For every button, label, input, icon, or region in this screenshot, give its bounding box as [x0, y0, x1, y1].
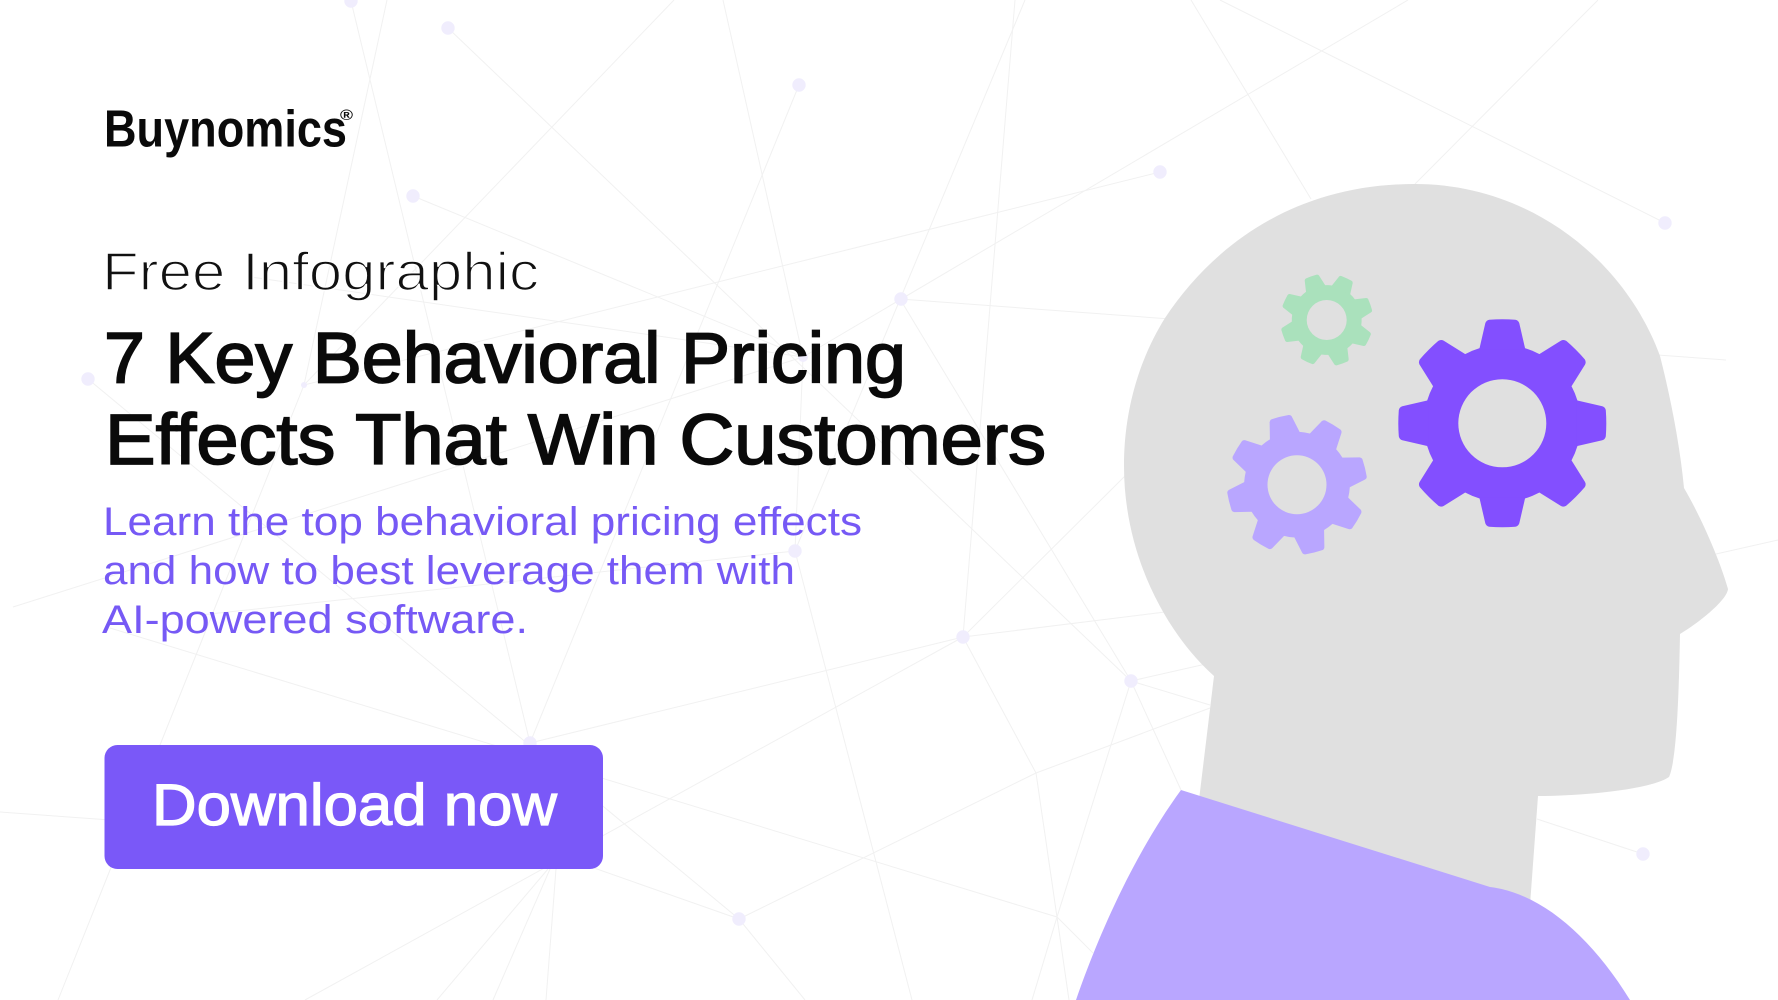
illustration: head silhouette with gears [1076, 184, 1728, 1000]
subtitle text block: AI-powered software. [102, 598, 528, 642]
gear: medium lavender [1212, 400, 1382, 570]
gear: small green [1268, 261, 1386, 379]
button: Download now [104, 745, 603, 869]
subtitle text block: and how to best leverage them with [103, 549, 795, 593]
head silhouette [1124, 184, 1728, 905]
logo: Buynomics: ® [340, 107, 353, 124]
subtitle text block [102, 500, 862, 642]
button: Download now: Download now [152, 773, 558, 838]
title: Effects That Win Customers [105, 401, 1046, 480]
logo: Buynomics: Buynomics [104, 100, 347, 158]
shoulders [1076, 790, 1630, 1000]
subtitle text block: Learn the top behavioral pricing effects [103, 500, 862, 544]
title: 7 Key Behavioral Pricing [104, 320, 906, 398]
gear: large purple [1398, 319, 1606, 527]
heading: Free Infographic: Free Infographic [102, 242, 539, 302]
title [104, 320, 1046, 480]
